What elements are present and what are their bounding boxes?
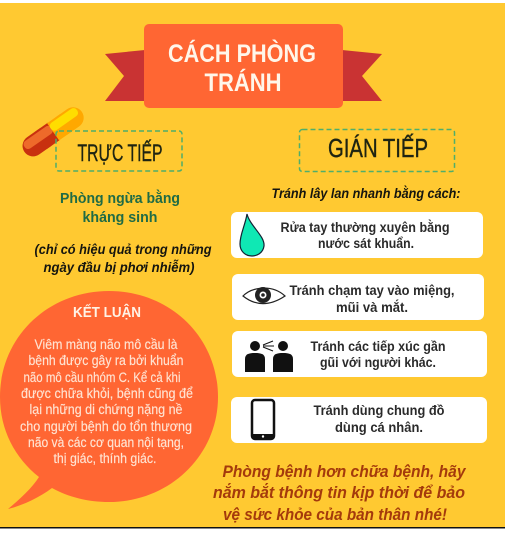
icon: phone (252, 400, 274, 439)
conclusion body: não mô cầu nhóm C. Kể cả khi (24, 370, 180, 385)
conclusion heading: KẾT LUẬN (73, 303, 141, 321)
closing message: vệ sức khỏe của bản thân nhé! (223, 505, 447, 524)
card: avoid touching face: mũi và mắt. (336, 300, 408, 315)
box: trực tiếp: TRỰC TIẾP (78, 139, 162, 167)
closing message (213, 462, 467, 524)
card: avoid close contact: gũi với người khác. (320, 355, 436, 370)
banner heading (168, 38, 316, 97)
conclusion body: được chữa khỏi, bệnh cũng để (21, 386, 193, 401)
conclusion body: Viêm màng não mô cầu là (34, 337, 178, 352)
ribbon right (342, 50, 382, 101)
card: hand washing (231, 212, 483, 258)
closing message: nắm bắt thông tin kịp thời để bảo (213, 483, 465, 502)
closing message: Phòng bệnh hơn chữa bệnh, hãy (222, 462, 467, 481)
card: avoid sharing items: dùng cá nhân. (335, 420, 423, 435)
title banner (105, 24, 382, 108)
box: gián tiếp: GIÁN TIẾP (328, 133, 428, 163)
conclusion body (20, 337, 193, 466)
card: hand washing: nước sát khuẩn. (318, 236, 414, 251)
icon: two people talking (245, 341, 293, 372)
icon: water drop (240, 214, 264, 256)
card: avoid sharing items: Tránh dùng chung đồ (314, 403, 444, 418)
text: effectiveness note (34, 241, 212, 275)
card: avoid close contact: Tránh các tiếp xúc gần (310, 339, 446, 354)
text: effectiveness note: ngày đầu bị phơi nhiễm) (44, 259, 195, 275)
conclusion body: lại những di chứng nặng nề (30, 402, 182, 417)
card: hand washing: Rửa tay thường xuyên bằng (280, 220, 450, 235)
banner heading: CÁCH PHÒNG (168, 38, 316, 68)
conclusion body: thị giác, thính giác. (54, 451, 156, 466)
box: trực tiếp (56, 131, 182, 171)
icon: capsule pill (18, 103, 88, 161)
conclusion body: cho người bệnh do tổn thương (20, 419, 192, 434)
icon: eye (243, 287, 285, 304)
conclusion body: não và các cơ quan nội tạng, (28, 435, 184, 450)
heading: spread avoidance: Tránh lây lan nhanh bằng cách: (272, 184, 460, 201)
banner panel (144, 24, 343, 108)
box: gián tiếp (300, 130, 454, 172)
panel: conclusion speech bubble (0, 291, 218, 509)
card: avoid touching face (232, 274, 484, 320)
card: avoid sharing items (231, 397, 487, 443)
conclusion body: bệnh được gây ra bởi khuẩn (28, 353, 184, 368)
card: avoid touching face: Tránh chạm tay vào miệng, (290, 283, 454, 298)
banner heading: TRÁNH (204, 68, 282, 97)
bubble shape (0, 291, 218, 509)
text: effectiveness note: (chỉ có hiệu quả trong những (34, 241, 212, 257)
text: antibiotic prevention: Phòng ngừa bằng (60, 189, 180, 207)
text: antibiotic prevention: kháng sinh (82, 209, 158, 226)
card: avoid close contact (232, 331, 487, 377)
text: antibiotic prevention (60, 189, 180, 226)
ribbon left (105, 50, 145, 101)
